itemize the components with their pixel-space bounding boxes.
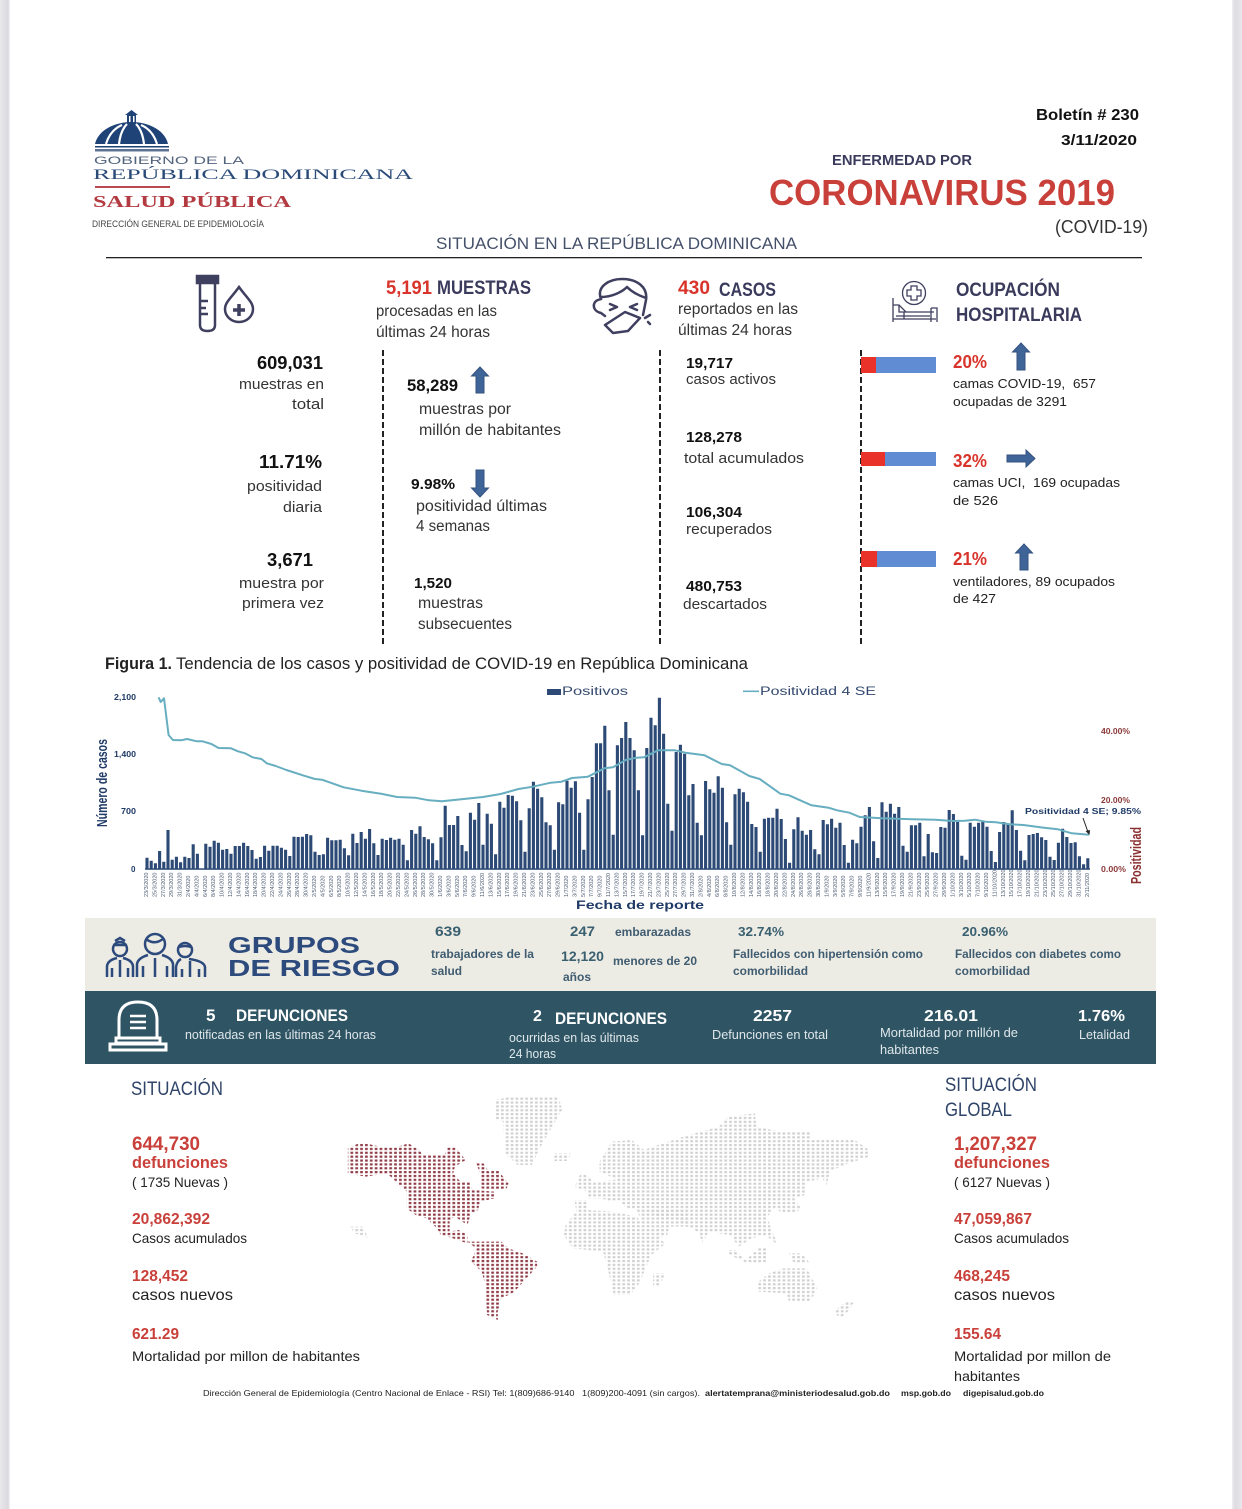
- column: per-million, positivity, subsequent samples: 9.98%: [411, 477, 455, 493]
- logo: Gobierno de la República Dominicana, Salud Pública: [92, 110, 413, 229]
- column: sample totals: primera vez: [242, 595, 324, 612]
- right axis labels: 40.00%: [1101, 727, 1130, 736]
- stat: deaths notified in 24 hours: 5: [206, 1006, 215, 1025]
- x axis date labels: 12/5/2020: [354, 873, 360, 897]
- column: sample totals: [239, 353, 324, 612]
- x axis date labels: 19/7/2020: [640, 873, 646, 897]
- title: Enfermedad por Coronavirus 2019: [769, 152, 1148, 237]
- panel: risk groups: [85, 918, 1156, 991]
- map: rest of the world: [350, 1097, 869, 1318]
- bulletin number and date: 3/11/2020: [1061, 132, 1137, 149]
- x axis date labels: 2/8/2020: [698, 876, 704, 897]
- x axis date labels: 9/7/2020: [598, 876, 604, 897]
- x axis date labels: [144, 869, 1091, 897]
- icon: face with mask: [594, 279, 650, 333]
- x axis date labels: 5/7/2020: [581, 876, 587, 897]
- column: case totals: casos activos: [686, 371, 776, 388]
- x axis date labels: 5/10/2020: [967, 873, 973, 897]
- left axis labels: 700: [121, 807, 137, 816]
- risk groups heading: [228, 932, 400, 981]
- logo: Gobierno de la República Dominicana, Salud Pública: SALUD PÚBLICA: [93, 192, 292, 211]
- occupancy: ventilators: 21%: [953, 549, 987, 569]
- stat: under 20: [561, 948, 697, 984]
- column: sample totals: diaria: [283, 499, 323, 516]
- x axis date labels: 24/5/2020: [404, 873, 410, 897]
- stat: lethality: 1.76%: [1078, 1008, 1125, 1025]
- panel: situation Americas: defunciones: [132, 1153, 228, 1172]
- footer contact line: msp.gob.do: [901, 1388, 951, 1398]
- right axis labels: [1101, 727, 1130, 874]
- x axis date labels: 31/10/2020: [1076, 869, 1082, 897]
- x axis date labels: 23/3/2020: [144, 873, 150, 897]
- risk groups heading: GRUPOS: [228, 932, 360, 958]
- x axis date labels: 18/5/2020: [379, 873, 385, 897]
- x axis date labels: 10/4/2020: [220, 873, 226, 897]
- x axis date labels: 14/4/2020: [236, 873, 242, 897]
- x axis date labels: 15/7/2020: [623, 873, 629, 897]
- x axis date labels: 25/6/2020: [539, 873, 545, 897]
- panel: global situation: GLOBAL: [945, 1100, 1012, 1121]
- x axis date labels: 4/4/2020: [194, 876, 200, 897]
- occupancy: ventilators: ventiladores, 89 ocupados: [953, 574, 1116, 589]
- occupancy: ventilators: de 427: [953, 591, 996, 606]
- x axis date labels: 9/9/2020: [858, 876, 864, 897]
- x axis date labels: 1/9/2020: [824, 876, 830, 897]
- x axis date labels: 6/5/2020: [329, 876, 335, 897]
- x axis date labels: 4/8/2020: [707, 876, 713, 897]
- stat: total deaths: [712, 1008, 828, 1042]
- x axis date labels: 29/6/2020: [556, 873, 562, 897]
- column: case totals: recuperados: [686, 521, 772, 538]
- occupancy: COVID beds: ocupadas de 3291: [953, 394, 1067, 409]
- logo: Gobierno de la República Dominicana, Salud Pública: REPÚBLICA DOMINICANA: [93, 166, 413, 183]
- footer contact line: [203, 1388, 1044, 1398]
- stat: under 20: 12,120: [561, 948, 604, 964]
- panel: situation Americas: Casos acumulados: [132, 1230, 247, 1246]
- bulletin number and date: [1036, 107, 1139, 149]
- column: case totals: [683, 355, 804, 613]
- panel: global situation: 47,059,867: [954, 1211, 1032, 1228]
- icon: test tube and blood drop: [197, 276, 253, 331]
- line: positivity 4 SE: [159, 697, 1089, 835]
- right axis title: Positividad: [1128, 827, 1145, 884]
- left axis labels: [114, 693, 137, 874]
- x axis date labels: 24/8/2020: [791, 873, 797, 897]
- x axis date labels: 8/4/2020: [211, 876, 217, 897]
- x axis date labels: 10/5/2020: [346, 873, 352, 897]
- column: per-million, positivity, subsequent samples: subsecuentes: [418, 616, 512, 633]
- title: Enfermedad por Coronavirus 2019: CORONAVIRUS 2019: [769, 172, 1115, 213]
- stat: deaths occurred in 24 hours: DEFUNCIONES: [555, 1009, 667, 1028]
- cases headline: últimas 24 horas: [678, 322, 792, 339]
- stat: deaths occurred in 24 hours: 24 horas: [509, 1046, 556, 1061]
- panel: global situation: casos nuevos: [954, 1287, 1055, 1304]
- x axis date labels: 3/6/2020: [446, 876, 452, 897]
- x axis date labels: 7/9/2020: [850, 876, 856, 897]
- x axis date labels: 27/3/2020: [161, 873, 167, 897]
- stat: hypertension: comorbilidad: [733, 964, 808, 978]
- hospital occupancy headline: [956, 279, 1082, 326]
- occupancy: ICU beds: de 526: [953, 493, 998, 508]
- x axis date labels: 25/10/2020: [1051, 869, 1057, 897]
- title: Enfermedad por Coronavirus 2019: (COVID-19): [1055, 217, 1148, 237]
- x axis date labels: 5/9/2020: [841, 876, 847, 897]
- x axis date labels: 22/5/2020: [396, 873, 402, 897]
- x axis date labels: 23/7/2020: [656, 873, 662, 897]
- x axis date labels: 15/9/2020: [883, 873, 889, 897]
- panel: global situation: defunciones: [954, 1153, 1050, 1172]
- column: sample totals: 11.71%: [259, 452, 322, 472]
- stat: deaths notified in 24 hours: [185, 1006, 376, 1042]
- column: per-million, positivity, subsequent samples: millón de habitantes: [419, 422, 561, 439]
- x axis date labels: 2/4/2020: [186, 876, 192, 897]
- x axis date labels: 15/6/2020: [497, 873, 503, 897]
- x axis date labels: 25/3/2020: [152, 873, 158, 897]
- arrow: up: [472, 367, 488, 393]
- panel: situation Americas: SITUACIÓN: [131, 1078, 223, 1100]
- risk groups heading: DE RIESGO: [228, 955, 400, 981]
- x axis date labels: 2/5/2020: [312, 876, 318, 897]
- x axis date labels: 21/6/2020: [522, 873, 528, 897]
- x axis date labels: 3/9/2020: [833, 876, 839, 897]
- x axis date labels: 6/4/2020: [203, 876, 209, 897]
- x axis date labels: 12/4/2020: [228, 873, 234, 897]
- stat: hypertension: Fallecidos con hipertensión como: [733, 947, 923, 961]
- callout: positivity 9.85%: Positividad 4 SE; 9.85%: [1025, 807, 1141, 816]
- x axis date labels: 8/8/2020: [724, 876, 730, 897]
- stat: hypertension: [733, 924, 923, 978]
- left axis title: Número de casos: [94, 739, 111, 827]
- x axis date labels: 30/4/2020: [304, 873, 310, 897]
- x axis date labels: 29/9/2020: [942, 873, 948, 897]
- stat: deaths notified in 24 hours: DEFUNCIONES: [236, 1006, 348, 1025]
- x axis date labels: 11/7/2020: [606, 873, 612, 897]
- panel: global situation: 468,245: [954, 1268, 1010, 1285]
- column: case totals: descartados: [683, 596, 767, 613]
- panel: global situation: ( 6127 Nuevas ): [954, 1174, 1050, 1190]
- stat: lethality: [1078, 1008, 1130, 1042]
- logo: Gobierno de la República Dominicana, Salud Pública: GOBIERNO DE LA: [94, 155, 245, 167]
- stat: pregnant: [570, 923, 691, 939]
- x axis date labels: 1/7/2020: [564, 876, 570, 897]
- x axis date labels: 14/8/2020: [749, 873, 755, 897]
- x axis date labels: 7/6/2020: [463, 876, 469, 897]
- occupancy: COVID beds: camas COVID-19, 657: [953, 376, 1096, 391]
- x axis date labels: 16/4/2020: [245, 873, 251, 897]
- column: sample totals: positividad: [247, 478, 322, 495]
- panel: situation Americas: 128,452: [132, 1268, 188, 1285]
- occupancy: ICU beds: camas UCI, 169 ocupadas: [953, 475, 1121, 490]
- map: Americas highlighted: [348, 1143, 537, 1320]
- samples headline: MUESTRAS: [437, 278, 531, 299]
- cases headline: reportados en las: [678, 301, 798, 318]
- left axis labels: 0: [131, 865, 136, 874]
- left axis labels: 2,100: [114, 693, 137, 702]
- cases headline: [678, 278, 798, 339]
- arrow: down: [472, 470, 488, 497]
- x axis date labels: 17/10/2020: [1018, 869, 1024, 897]
- stat: total deaths: 2257: [753, 1008, 792, 1025]
- panel: global situation: 155.64: [954, 1326, 1001, 1343]
- map: dotted world map: [348, 1097, 869, 1320]
- x axis date labels: 15/10/2020: [1009, 869, 1015, 897]
- column: sample totals: muestra por: [239, 575, 324, 592]
- column: case totals: 128,278: [686, 429, 742, 446]
- panel: situation Americas: ( 1735 Nuevas ): [132, 1174, 228, 1190]
- x axis date labels: 14/5/2020: [362, 873, 368, 897]
- occupancy: COVID beds: [861, 343, 1096, 409]
- x axis date labels: 31/3/2020: [178, 873, 184, 897]
- panel: global situation: SITUACIÓN: [945, 1074, 1037, 1096]
- stat: pregnant: embarazadas: [615, 925, 691, 939]
- samples headline: [376, 278, 531, 341]
- x axis date labels: 16/8/2020: [757, 873, 763, 897]
- x axis date labels: 28/8/2020: [808, 873, 814, 897]
- x axis date labels: 20/5/2020: [388, 873, 394, 897]
- panel: situation Americas: 20,862,392: [132, 1211, 210, 1228]
- x axis date labels: 13/7/2020: [614, 873, 620, 897]
- left axis labels: 1,400: [114, 750, 137, 759]
- x axis date labels: 29/7/2020: [682, 873, 688, 897]
- title: Enfermedad por Coronavirus 2019: ENFERMEDAD POR: [832, 152, 972, 169]
- cases headline: 430: [678, 278, 710, 299]
- x axis date labels: 10/8/2020: [732, 873, 738, 897]
- footer contact line: digepisalud.gob.do: [963, 1388, 1044, 1398]
- x axis date labels: 3/10/2020: [959, 873, 965, 897]
- x axis date labels: 28/4/2020: [295, 873, 301, 897]
- panel: global situation: habitantes: [954, 1368, 1020, 1384]
- x axis date labels: 27/9/2020: [934, 873, 940, 897]
- stat: under 20: años: [563, 970, 591, 984]
- column: sample totals: 3,671: [267, 550, 313, 570]
- samples headline: procesadas en las: [376, 303, 497, 320]
- bulletin number and date: Boletín # 230: [1036, 107, 1139, 124]
- x axis date labels: 1/6/2020: [438, 876, 444, 897]
- x axis date labels: 13/6/2020: [488, 873, 494, 897]
- column: per-million, positivity, subsequent samples: 4 semanas: [416, 518, 490, 535]
- stat: health workers: salud: [431, 964, 462, 978]
- samples headline: 5,191: [386, 278, 432, 299]
- x axis date labels: 26/5/2020: [413, 873, 419, 897]
- footer contact line: Dirección General de Epidemiología (Centro Nacional de Enlace - RSI) Tel: 1(809)686-9140 1(809)200-4091 (sin cargos).: [203, 1388, 700, 1398]
- column: sample totals: total: [292, 396, 324, 413]
- column: per-million, positivity, subsequent samples: [407, 367, 561, 633]
- x axis date labels: 19/9/2020: [900, 873, 906, 897]
- stat: lethality: Letalidad: [1079, 1027, 1130, 1042]
- x axis date labels: 11/10/2020: [992, 870, 998, 897]
- x axis date labels: 26/4/2020: [287, 873, 293, 897]
- stat: deaths occurred in 24 hours: [509, 1008, 667, 1061]
- legend: [547, 686, 876, 698]
- stat: total deaths: Defunciones en total: [712, 1027, 828, 1042]
- panel: global situation: Mortalidad por millon de: [954, 1348, 1111, 1364]
- x axis date labels: 26/8/2020: [799, 873, 805, 897]
- x axis date labels: 31/7/2020: [690, 873, 696, 897]
- stat: health workers: [431, 923, 534, 978]
- x axis date labels: 27/7/2020: [673, 873, 679, 897]
- x axis date labels: 30/8/2020: [816, 873, 822, 897]
- stat: deaths occurred in 24 hours: 2: [533, 1008, 542, 1025]
- stat: diabetes: [955, 924, 1121, 978]
- stat: health workers: 639: [435, 923, 461, 939]
- x axis date labels: 28/5/2020: [421, 873, 427, 897]
- x axis date labels: 19/6/2020: [514, 873, 520, 897]
- x axis date labels: 1/10/2020: [950, 873, 956, 897]
- x axis date labels: 18/4/2020: [253, 873, 259, 897]
- x axis date labels: 13/9/2020: [875, 873, 881, 897]
- x axis date labels: 3/7/2020: [572, 876, 578, 897]
- column: per-million, positivity, subsequent samples: muestras: [418, 595, 483, 612]
- x axis date labels: 11/6/2020: [480, 873, 486, 897]
- column: case totals: 106,304: [686, 504, 743, 521]
- panel: global situation: Casos acumulados: [954, 1230, 1069, 1246]
- x axis date labels: 16/5/2020: [371, 873, 377, 897]
- x axis date labels: 24/4/2020: [278, 873, 284, 897]
- icon: tombstone: [110, 1002, 166, 1050]
- x axis date labels: 25/9/2020: [925, 873, 931, 897]
- callout: positivity 9.85%: [1025, 807, 1141, 835]
- x axis date labels: 12/8/2020: [740, 873, 746, 897]
- x axis date labels: 2/11/2020: [1085, 873, 1091, 897]
- figure caption: Figura 1.: [105, 655, 172, 673]
- cases headline: CASOS: [719, 280, 776, 301]
- stat: diabetes: Fallecidos con diabetes como: [955, 947, 1121, 961]
- x axis date labels: 17/9/2020: [892, 873, 898, 897]
- legend: Positividad 4 SE: [760, 686, 876, 698]
- legend: Positivos: [562, 686, 628, 698]
- panel: situation Americas: 644,730: [132, 1134, 200, 1155]
- x axis date labels: 21/7/2020: [648, 873, 654, 897]
- column: case totals: total acumulados: [684, 450, 804, 467]
- x axis date labels: 17/6/2020: [505, 873, 511, 897]
- column: per-million, positivity, subsequent samples: positividad últimas: [416, 498, 547, 515]
- x axis date labels: 13/10/2020: [1001, 869, 1007, 897]
- x axis date labels: 20/8/2020: [774, 873, 780, 897]
- hospital occupancy headline: HOSPITALARIA: [956, 305, 1082, 326]
- stat: diabetes: 20.96%: [962, 924, 1008, 939]
- right axis labels: 20.00%: [1101, 796, 1130, 805]
- occupancy: ventilators: [861, 544, 1116, 606]
- x axis date labels: 9/6/2020: [472, 876, 478, 897]
- panel: global situation: 1,207,327: [954, 1134, 1037, 1155]
- stat: mortality per million: Mortalidad por millón de: [880, 1025, 1018, 1040]
- panel: situation Americas: Mortalidad por millon de habitantes: [132, 1348, 360, 1364]
- stat: mortality per million: 216.01: [924, 1008, 978, 1025]
- stat: deaths notified in 24 hours: notificadas en las últimas 24 horas: [185, 1027, 376, 1042]
- occupancy: ICU beds: [861, 450, 1121, 508]
- x axis date labels: 27/6/2020: [547, 873, 553, 897]
- x axis date labels: 23/10/2020: [1043, 869, 1049, 897]
- column: per-million, positivity, subsequent samples: 58,289: [407, 377, 458, 395]
- x axis date labels: 5/6/2020: [455, 876, 461, 897]
- x axis date labels: 23/9/2020: [917, 873, 923, 897]
- panel: situation Americas: 621.29: [132, 1326, 179, 1343]
- x axis date labels: 22/8/2020: [782, 873, 788, 897]
- panel: situation Americas: casos nuevos: [132, 1287, 233, 1304]
- x axis date labels: 29/3/2020: [169, 873, 175, 897]
- stat: pregnant: 247: [570, 923, 595, 939]
- stat: deaths occurred in 24 hours: ocurridas en las últimas: [509, 1030, 639, 1045]
- x axis date labels: 27/10/2020: [1060, 869, 1066, 897]
- panel: situation Americas: [131, 1078, 360, 1364]
- column: per-million, positivity, subsequent samples: 1,520: [414, 576, 452, 592]
- stat: under 20: menores de 20: [613, 954, 697, 968]
- stat: diabetes: comorbilidad: [955, 964, 1030, 978]
- x axis date labels: 19/10/2020: [1026, 869, 1032, 897]
- occupancy: ICU beds: 32%: [953, 451, 987, 471]
- x axis date labels: 9/10/2020: [984, 873, 990, 897]
- bars: daily positives: [147, 698, 1088, 869]
- icon: dome: [95, 110, 169, 152]
- x axis date labels: 30/5/2020: [430, 873, 436, 897]
- stat: health workers: trabajadores de la: [431, 947, 534, 961]
- x axis date labels: 21/9/2020: [908, 873, 914, 897]
- x axis date labels: 6/8/2020: [715, 876, 721, 897]
- column: case totals: 480,753: [686, 578, 742, 595]
- right axis labels: 0.00%: [1101, 865, 1126, 874]
- samples headline: últimas 24 horas: [376, 324, 490, 341]
- x axis date labels: 11/9/2020: [866, 873, 872, 897]
- dashed column dividers: [383, 350, 861, 645]
- column: per-million, positivity, subsequent samples: muestras por: [419, 401, 511, 418]
- x axis date labels: 22/4/2020: [270, 873, 276, 897]
- x axis title: Fecha de reporte: [576, 898, 704, 912]
- chart: cases and positivity trend: [94, 686, 1145, 912]
- icon: three people: [107, 934, 205, 977]
- stat: hypertension: 32.74%: [738, 924, 784, 939]
- x axis date labels: 25/7/2020: [665, 873, 671, 897]
- icon: hospital bed: [893, 282, 937, 322]
- column: sample totals: 609,031: [257, 353, 323, 373]
- column: case totals: 19,717: [686, 355, 733, 372]
- x axis date labels: 23/6/2020: [530, 873, 536, 897]
- x axis date labels: 7/7/2020: [589, 876, 595, 897]
- heading: situation in the Dominican Republic: SITUACIÓN EN LA REPÚBLICA DOMINICANA: [436, 234, 798, 253]
- x axis date labels: 21/10/2020: [1034, 869, 1040, 897]
- stat: mortality per million: [880, 1008, 1018, 1057]
- x axis date labels: 7/10/2020: [976, 873, 982, 897]
- x axis date labels: 18/8/2020: [766, 873, 772, 897]
- x axis date labels: 29/10/2020: [1068, 869, 1074, 897]
- x axis date labels: 4/5/2020: [320, 876, 326, 897]
- occupancy: COVID beds: 20%: [953, 352, 987, 372]
- hospital occupancy headline: OCUPACIÓN: [956, 279, 1060, 301]
- x axis date labels: 20/4/2020: [262, 873, 268, 897]
- x axis date labels: 17/7/2020: [631, 873, 637, 897]
- panel: global situation: [945, 1074, 1111, 1384]
- stat: mortality per million: habitantes: [880, 1042, 939, 1057]
- panel: deaths: [85, 991, 1156, 1064]
- x axis date labels: 8/5/2020: [337, 876, 343, 897]
- figure caption: Tendencia de los casos y positividad de COVID-19 en República Dominicana: [176, 655, 749, 673]
- column: hospital occupancy bars: [861, 343, 1121, 606]
- column: sample totals: muestras en: [239, 376, 324, 393]
- footer contact line: alertatemprana@ministeriodesalud.gob.do: [705, 1388, 890, 1398]
- logo: Gobierno de la República Dominicana, Salud Pública: DIRECCIÓN GENERAL DE EPIDEMIOLOGÍA: [92, 219, 264, 229]
